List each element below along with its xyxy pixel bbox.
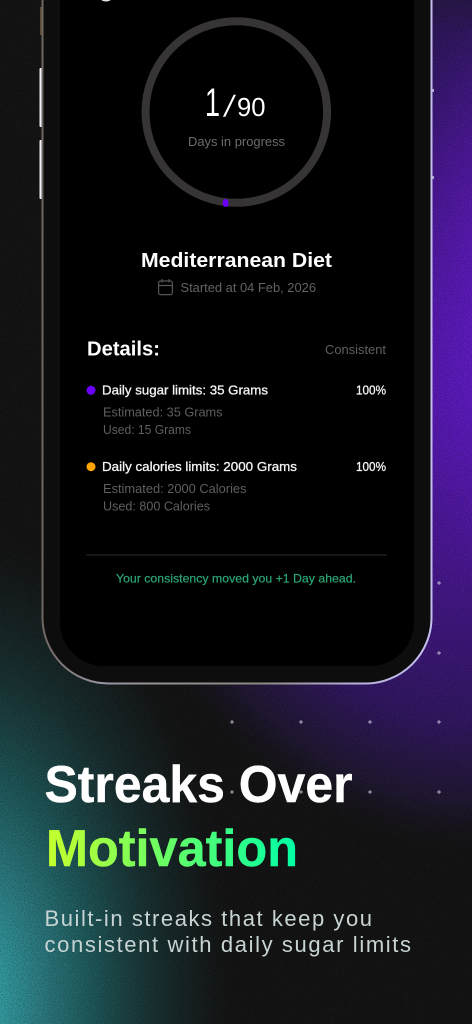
details heading: Details: xyxy=(87,338,160,360)
detail row: sugar xyxy=(86,382,386,437)
plan title: Mediterranean Diet xyxy=(141,250,332,272)
detail row: calories: Used: 800 Calories xyxy=(103,500,210,514)
phone side buttons xyxy=(40,7,434,199)
headline: Motivation xyxy=(46,820,298,878)
ring caption: Days in progress xyxy=(188,134,285,149)
details heading xyxy=(87,338,387,360)
status bar fragment xyxy=(101,0,111,2)
phone mockup xyxy=(42,0,432,684)
headline xyxy=(44,756,352,878)
ring count xyxy=(205,81,266,125)
sparkle stars xyxy=(230,581,441,794)
plan start date: Started at 04 Feb, 2026 xyxy=(180,280,316,295)
detail row: sugar: Estimated: 35 Grams xyxy=(103,406,222,420)
detail row: calories: Estimated: 2000 Calories xyxy=(103,482,246,496)
icon: purple dot xyxy=(86,386,96,395)
phone screen xyxy=(60,0,414,666)
detail row: sugar: Daily sugar limits: 35 Grams xyxy=(102,382,269,398)
consistency message: Your consistency moved you +1 Day ahead. xyxy=(116,572,356,586)
subtitle: Built-in streaks that keep you xyxy=(44,906,372,931)
details heading: Consistent xyxy=(325,343,387,357)
icon: calendar xyxy=(159,279,172,295)
detail row: calories: 100% xyxy=(356,459,386,474)
subtitle xyxy=(44,906,411,957)
detail row: calories xyxy=(86,459,386,514)
ring count: 90 xyxy=(237,92,266,122)
detail row: calories: Daily calories limits: 2000 Grams xyxy=(102,459,298,474)
phone frame xyxy=(42,0,432,684)
subtitle: consistent with daily sugar limits xyxy=(44,932,411,957)
icon: orange dot xyxy=(86,462,96,471)
progress ring xyxy=(146,21,327,207)
headline: Streaks Over xyxy=(44,756,352,814)
ring count: / xyxy=(222,91,237,123)
detail row: sugar: Used: 15 Grams xyxy=(103,423,191,437)
detail row: sugar: 100% xyxy=(356,382,386,398)
ring count: 1 xyxy=(205,81,220,125)
